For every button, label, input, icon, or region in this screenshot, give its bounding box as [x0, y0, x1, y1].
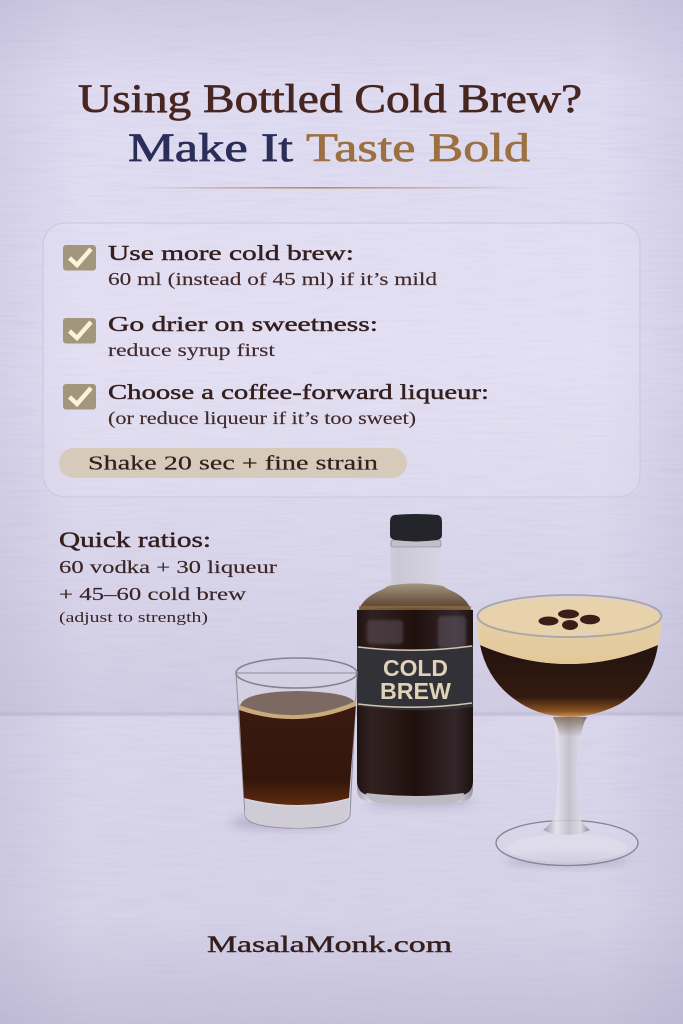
bottle foam — [357, 584, 473, 622]
bottle label: BREW — [380, 678, 451, 704]
item 1 heading: Use more cold brew: — [108, 241, 354, 265]
bottle base — [366, 793, 464, 804]
glass foam ring — [239, 701, 356, 719]
item 3 — [63, 380, 489, 429]
bottle coffee — [357, 608, 473, 796]
illustration: glass — [236, 658, 357, 828]
glass rim — [236, 658, 357, 688]
ratios line 1: 60 vodka + 30 liqueur — [59, 557, 277, 577]
background wall — [0, 0, 683, 716]
item 3 heading: Choose a coffee-forward liqueur: — [108, 380, 489, 404]
shake pill — [59, 448, 407, 478]
neck ring — [391, 540, 441, 547]
title line 2: Make It — [128, 125, 293, 170]
illustration: coupe — [477, 595, 662, 866]
shake pill: Shake 20 sec + fine strain — [88, 452, 378, 474]
footer website: MasalaMonk.com — [207, 932, 452, 957]
panel: checklist — [43, 223, 640, 497]
title divider — [130, 187, 540, 189]
illustration: bottle — [357, 514, 473, 804]
icon: check 2 — [63, 318, 96, 344]
item 2 heading: Go drier on sweetness: — [108, 312, 378, 336]
item 2 detail: reduce syrup first — [108, 340, 275, 360]
icon: check 1 — [63, 245, 96, 270]
icon: coffee beans — [538, 610, 600, 630]
title line 1: Using Bottled Cold Brew? — [78, 76, 582, 121]
quick ratios — [59, 527, 277, 626]
table surface — [0, 715, 683, 1024]
bottle cap — [390, 514, 442, 542]
ratios note: (adjust to strength) — [59, 610, 208, 626]
glass surface — [240, 691, 355, 716]
coupe foam top — [479, 597, 659, 635]
item 1 — [63, 241, 437, 290]
coupe stem — [543, 717, 590, 835]
item 2 — [63, 312, 378, 360]
coupe foam — [477, 616, 662, 664]
item 3 detail: (or reduce liqueur if it’s too sweet) — [108, 408, 416, 429]
item 1 detail: 60 ml (instead of 45 ml) if it’s mild — [108, 269, 437, 290]
coupe rim — [478, 595, 662, 637]
glass coffee — [239, 703, 356, 805]
coupe liquid — [480, 645, 658, 717]
coupe base — [496, 820, 638, 866]
reflections — [367, 620, 403, 644]
title line 2: Taste Bold — [306, 125, 530, 170]
ratios heading: Quick ratios: — [59, 527, 211, 552]
glass base — [245, 800, 349, 828]
icon: check 3 — [63, 384, 96, 410]
bottle label — [357, 645, 473, 710]
ratios line 2: + 45–60 cold brew — [59, 584, 246, 604]
bottle label: COLD — [383, 655, 448, 681]
title — [78, 76, 582, 170]
contact shadows — [230, 798, 629, 865]
glass body — [236, 673, 357, 828]
bottle glass — [357, 540, 473, 802]
